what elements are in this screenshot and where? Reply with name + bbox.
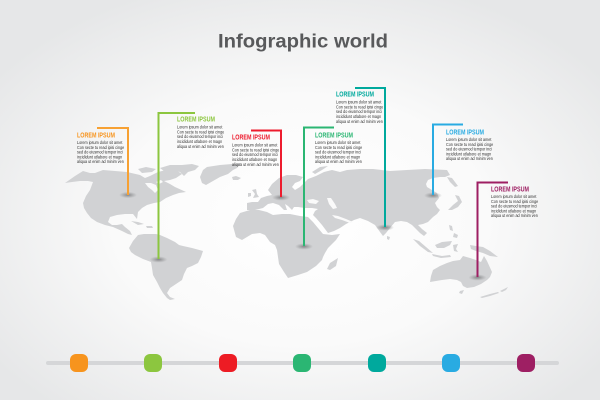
body text: Lorem ipsum dolor sit amet — [315, 140, 361, 145]
body text: incididunt utlabore et magn — [177, 139, 223, 144]
heading: LOREM IPSUM — [446, 128, 484, 136]
iceland — [232, 176, 241, 180]
body text: sed do eiusmod tempor inci — [336, 109, 382, 114]
sulawesi — [453, 244, 458, 252]
body text: aliqua ut enim ad minim ven — [232, 161, 279, 167]
sri lanka — [387, 236, 390, 240]
body text: sed do eiusmod tempor inci — [491, 203, 537, 209]
body text: Con secte tu read ipisi cinge — [491, 198, 539, 204]
greenland — [200, 163, 241, 185]
marker: red — [219, 354, 237, 372]
body text: Con secte tu read ipisi cinge — [446, 141, 494, 147]
caribbean — [131, 221, 153, 228]
heading: LOREM IPSUM — [77, 130, 115, 140]
canadian arctic islands — [138, 164, 199, 176]
body text: Lorem ipsum dolor sit amet — [77, 140, 123, 145]
callout: teal pin — [336, 88, 394, 231]
pin shadow — [272, 194, 290, 201]
body text: sed do eiusmod tempor inci — [446, 146, 492, 152]
new guinea — [470, 245, 498, 257]
australia — [430, 256, 492, 288]
body text: Con secte tu read ipisi cinge — [77, 144, 125, 150]
pin shadow — [295, 243, 313, 250]
marker: emerald — [293, 354, 311, 372]
body text: Lorem ipsum dolor sit amet — [336, 99, 382, 105]
body text: sed do eiusmod tempor inci — [77, 149, 123, 155]
heading: LOREM IPSUM — [336, 90, 374, 98]
pin line — [158, 113, 195, 259]
body text: sed do eiusmod tempor inci — [177, 134, 223, 139]
body text: aliqua ut enim ad minim ven — [315, 159, 362, 164]
body text: Con secte tu read ipisi cinge — [315, 144, 363, 150]
marker: blue — [442, 354, 460, 372]
body text: incididunt utlabore et magn — [336, 114, 382, 119]
new zealand — [480, 287, 508, 298]
uk and ireland — [248, 189, 259, 198]
heading: LOREM IPSUM — [315, 130, 353, 140]
body text: incididunt utlabore et magn — [315, 154, 361, 160]
pin line — [251, 130, 281, 197]
marker: teal — [368, 354, 386, 372]
heading: LOREM IPSUM — [232, 132, 270, 142]
pin line — [478, 182, 508, 277]
borneo — [435, 241, 452, 248]
callout: orange pin — [77, 128, 137, 198]
africa — [233, 210, 340, 278]
callout: blue pin — [424, 124, 494, 199]
body text: aliqua ut enim ad minim ven — [336, 118, 383, 124]
marker: orange — [70, 354, 88, 372]
europe and asia — [247, 169, 450, 236]
pin shadow — [424, 192, 442, 199]
body text: Con secte tu read ipisi cinge — [232, 147, 280, 153]
pin line — [433, 124, 463, 195]
heading: LOREM IPSUM — [491, 184, 529, 194]
madagascar — [327, 258, 338, 270]
world map — [65, 163, 508, 300]
pin line — [355, 88, 385, 227]
body text: aliqua ut enim ad minim ven — [77, 159, 124, 164]
body text: aliqua ut enim ad minim ven — [491, 213, 538, 218]
callout: emerald pin — [295, 128, 363, 250]
pin shadow — [119, 192, 137, 198]
callout: red pin — [232, 130, 290, 201]
pin line — [97, 128, 128, 195]
body text: aliqua ut enim ad minim ven — [177, 143, 224, 149]
body text: Lorem ipsum dolor sit amet — [446, 137, 492, 142]
body text: Con secte tu read ipisi cinge — [336, 104, 384, 110]
title: Infographic world — [218, 30, 388, 52]
body text: sed do eiusmod tempor inci — [232, 152, 278, 157]
body text: incididunt utlabore et magn — [491, 208, 537, 214]
callout: green pin — [150, 113, 225, 263]
inland seas — [307, 198, 353, 223]
timeline bar — [46, 361, 559, 365]
philippines — [449, 225, 458, 238]
south america — [129, 234, 203, 300]
body text: incididunt utlabore et magn — [77, 154, 123, 160]
sumatra and java — [413, 239, 451, 258]
japan — [448, 195, 462, 210]
north america — [65, 170, 186, 235]
heading: LOREM IPSUM — [177, 114, 215, 124]
callout: purple pin — [468, 182, 539, 281]
marker: green — [144, 354, 162, 372]
pin line — [304, 128, 334, 246]
pin shadow — [376, 224, 394, 231]
kamchatka and sakhalin — [447, 177, 458, 187]
body text: incididunt utlabore et magn — [446, 151, 492, 157]
body text: incididunt utlabore et magn — [232, 157, 278, 162]
body text: Lorem ipsum dolor sit amet — [491, 194, 537, 199]
arctic russian islands — [312, 166, 328, 174]
body text: aliqua ut enim ad minim ven — [446, 156, 493, 161]
body text: Lorem ipsum dolor sit amet — [177, 124, 223, 130]
pin shadow — [150, 256, 168, 263]
pin shadow — [468, 274, 486, 281]
timeline — [46, 354, 559, 372]
tasmania — [459, 290, 464, 294]
marker: purple — [517, 354, 535, 372]
hudson bay — [145, 180, 163, 193]
body text: Con secte tu read ipisi cinge — [177, 129, 225, 135]
body text: sed do eiusmod tempor inci — [315, 149, 361, 155]
body text: Lorem ipsum dolor sit amet — [232, 142, 278, 148]
